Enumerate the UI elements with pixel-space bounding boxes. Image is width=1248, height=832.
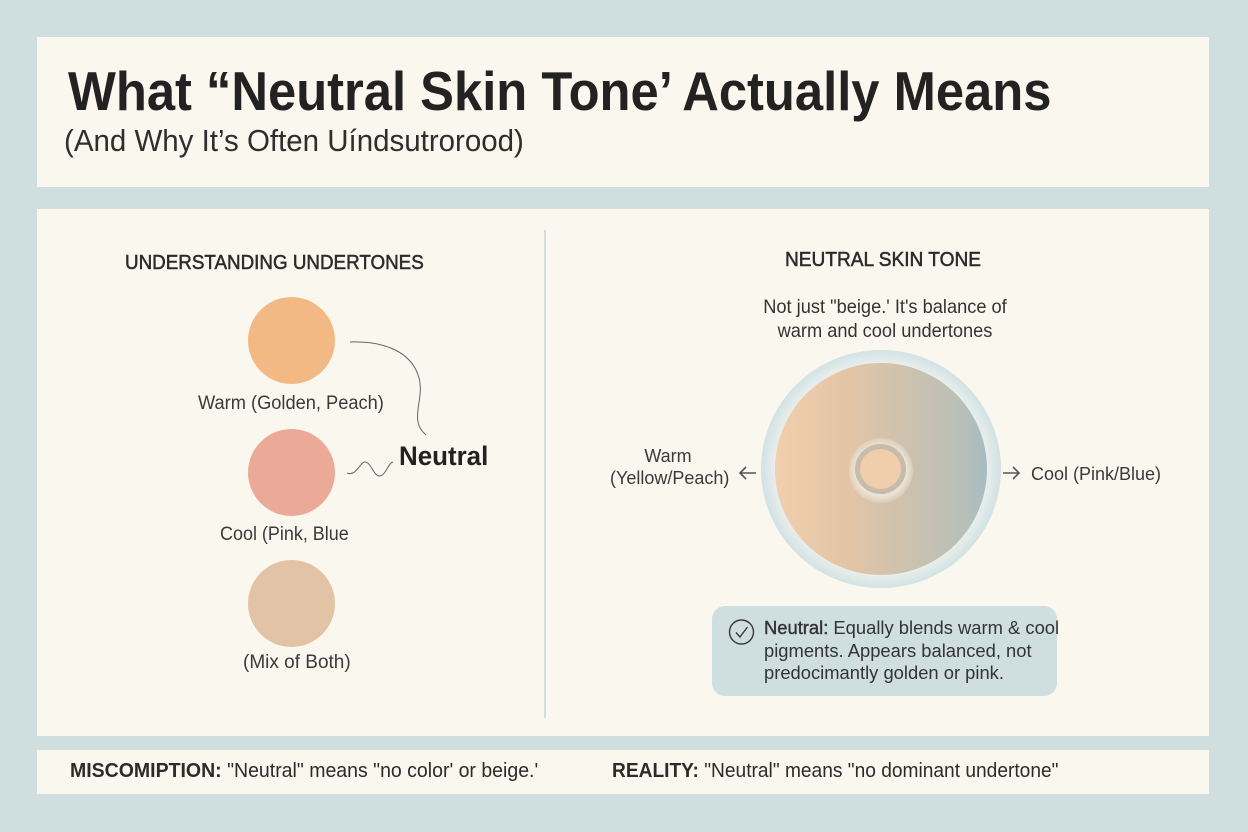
panel: understanding undertones (125, 252, 488, 673)
panel: neutral skin tone (610, 249, 1161, 588)
label: warm: Warm (644, 446, 692, 466)
swatch: cool (248, 429, 335, 516)
swatch: mix (248, 560, 335, 647)
icon: check (728, 619, 754, 645)
label: warm: (Yellow/Peach) (610, 468, 729, 488)
description (763, 296, 1007, 342)
connector: cool to neutral (346, 462, 394, 476)
title: What “Neutral Skin Tone’ Actually Means (68, 60, 1051, 122)
subtitle: (And Why It’s Often Uíndsutrorood) (64, 123, 524, 158)
centre swatch (849, 438, 913, 503)
callout: neutral definition (712, 606, 1057, 696)
divider (544, 230, 546, 718)
label: neutral: Neutral (399, 440, 488, 470)
misconception: MISCOMIPTION: "Neutral" means "no color' or beige.' (70, 760, 538, 782)
heading: neutral skin tone: NEUTRAL SKIN TONE (785, 249, 981, 271)
main panel (37, 209, 1209, 736)
heading: understanding undertones: UNDERSTANDING UNDERTONES (125, 252, 424, 274)
outer ring (761, 350, 1001, 588)
arrow: right (1003, 466, 1020, 480)
label: warm: Warm (Golden, Peach) (198, 393, 384, 414)
arrow: left (739, 466, 756, 480)
header panel (37, 37, 1209, 187)
reality: REALITY: "Neutral" means "no dominant undertone" (612, 760, 1058, 782)
callout text (764, 617, 1059, 683)
centre ring (854, 444, 906, 494)
label: cool: Cool (Pink, Blue (220, 524, 349, 545)
label: warm (610, 446, 729, 488)
callout text: Neutral: Equally blends warm & cool (764, 617, 1059, 638)
callout text: predocimantly golden or pink. (764, 662, 1004, 683)
callout text: pigments. Appears balanced, not (764, 640, 1032, 660)
description: Not just "beige.' It's balance of (763, 296, 1007, 318)
blended disc (775, 363, 987, 575)
connector: warm to neutral (350, 341, 426, 436)
footer panel (37, 750, 1209, 794)
description: warm and cool undertones (778, 320, 992, 342)
swatch: warm (248, 297, 335, 384)
label: mix: (Mix of Both) (243, 652, 351, 673)
label: cool: Cool (Pink/Blue) (1031, 464, 1161, 484)
